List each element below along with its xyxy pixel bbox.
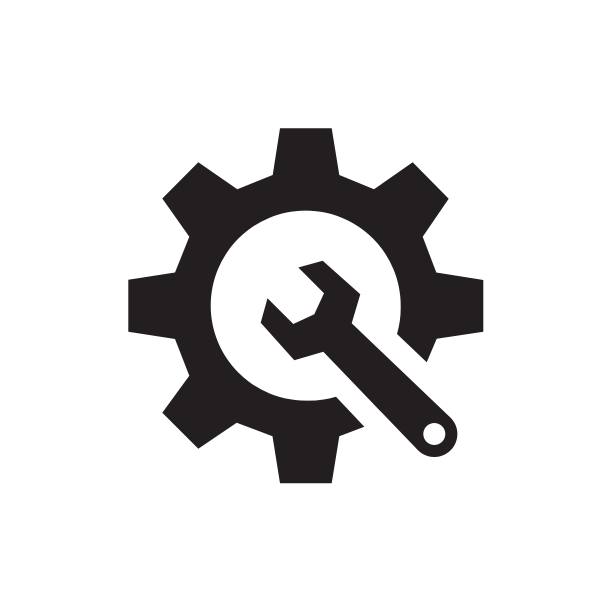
icon: wrench — [261, 261, 457, 457]
icon: gear — [128, 128, 483, 483]
